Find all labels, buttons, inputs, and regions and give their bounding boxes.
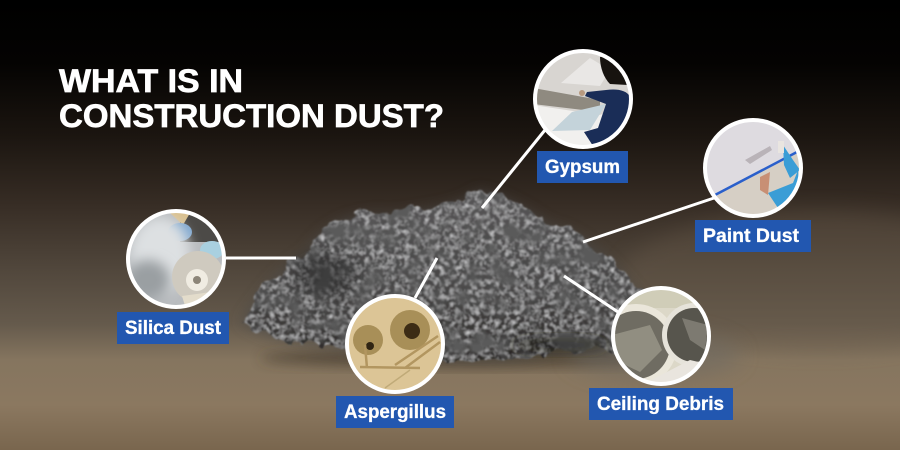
dust pile — [240, 190, 740, 379]
connector: paint dust — [583, 198, 714, 242]
title: WHAT IS IN — [59, 63, 243, 99]
title: CONSTRUCTION DUST? — [59, 98, 444, 134]
label: paint dust: Paint Dust — [703, 226, 800, 247]
label: paint dust — [695, 220, 811, 252]
connector: gypsum — [482, 130, 545, 208]
icon: paint dust photo — [703, 118, 803, 218]
connector: silica dust — [226, 256, 296, 260]
icon: gypsum photo — [533, 49, 633, 149]
label: gypsum — [537, 151, 628, 183]
title — [59, 63, 444, 134]
icon: silica dust photo — [126, 209, 230, 309]
icon: aspergillus photo — [345, 294, 445, 394]
label: aspergillus: Aspergillus — [344, 402, 446, 423]
label: silica dust — [117, 312, 229, 344]
label: ceiling debris — [589, 388, 733, 420]
connector: ceiling debris — [564, 276, 618, 312]
label: gypsum: Gypsum — [545, 157, 620, 178]
icon: ceiling debris photo — [611, 286, 711, 386]
connector: aspergillus — [415, 258, 437, 298]
label: ceiling debris: Ceiling Debris — [597, 394, 724, 415]
label: aspergillus — [336, 396, 454, 428]
label: silica dust: Silica Dust — [125, 318, 222, 339]
